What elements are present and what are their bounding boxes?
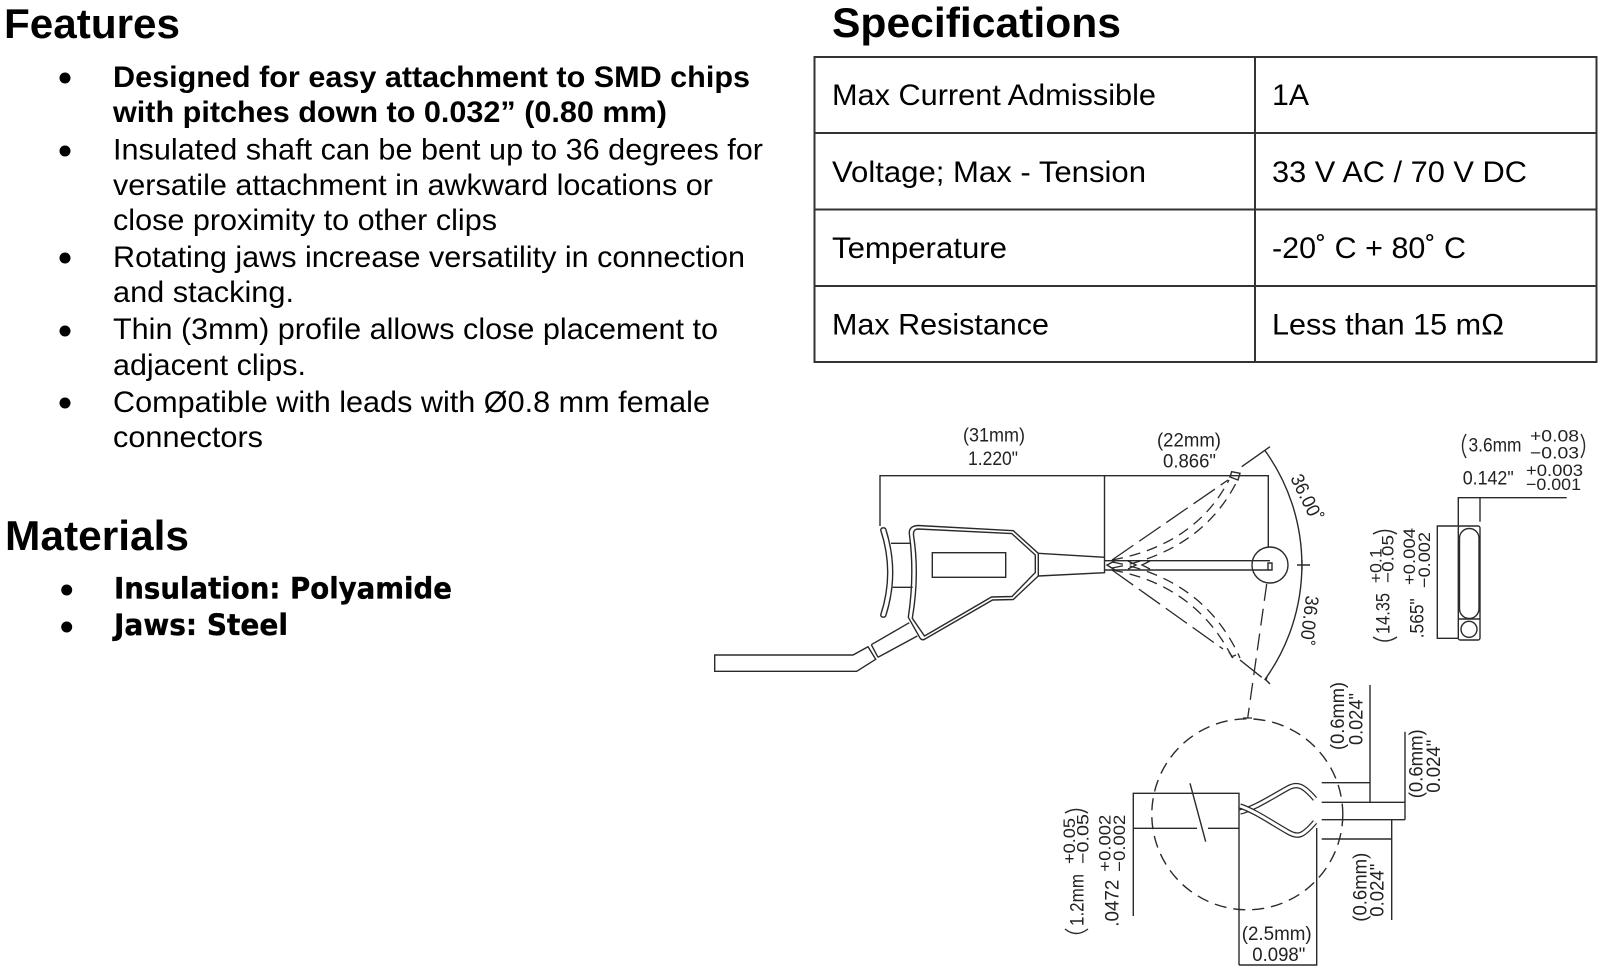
bullet: insulation: Insulation: Polyamide — [114, 572, 452, 606]
angle label lower: 36.00˚ — [1295, 594, 1322, 647]
dimension text: 1.2mm: −0.05 — [1073, 814, 1092, 864]
plunger thumb bar — [881, 528, 913, 617]
jaw lower — [1240, 806, 1315, 835]
specifications table: -20˚ C + 80˚ C — [1272, 232, 1466, 265]
clip body inner outline — [912, 529, 1035, 636]
dimension text: 2.5mm — [1242, 924, 1312, 966]
dimension text: 31mm — [963, 426, 1025, 470]
dimension text: upper 0.6mm: (0.6mm) — [1328, 682, 1349, 750]
tapered shaft — [1038, 553, 1104, 576]
diagram: end view — [1367, 427, 1584, 641]
dimension text: lower 0.6mm — [1351, 853, 1388, 922]
diagram: enlarged jaw detail — [1060, 682, 1445, 966]
dimension text: 1.2mm: 1.2mm — [1067, 874, 1088, 926]
bullet: rotating jaws: and stacking. — [113, 276, 294, 309]
specifications table: Less than 15 mΩ — [1272, 308, 1504, 342]
dimension text: 31mm: 1.220" — [968, 449, 1018, 470]
bullet: insulated shaft: versatile attachment in awkward locations or — [113, 169, 713, 202]
dimension text: upper 0.6mm — [1328, 682, 1368, 750]
specifications table — [814, 57, 1596, 362]
clip body outline — [908, 526, 1038, 640]
heading: Specifications: Specifications — [832, 0, 1121, 46]
width dimension text: +0.08 — [1530, 427, 1579, 446]
dimension text: 1.2mm — [1060, 810, 1129, 934]
heading: Materials: Materials — [5, 512, 189, 559]
width dimension text: 0.142" — [1463, 468, 1514, 489]
shaft stub with break line — [1133, 783, 1239, 965]
panel: specifications — [814, 0, 1596, 362]
clip label window — [932, 553, 1006, 577]
dimension text: lower 0.6mm: (0.6mm) — [1351, 853, 1372, 922]
height dimension text: +0.1 — [1367, 548, 1386, 583]
dimension text: right 0.6mm — [1406, 729, 1445, 798]
specifications table: 33 V AC / 70 V DC — [1272, 156, 1527, 189]
dimension text: 1.2mm: −0.002 — [1110, 815, 1129, 872]
end view body — [1458, 526, 1480, 640]
bullet: jaws: Jaws: Steel — [112, 608, 288, 642]
diagram: clip side view — [715, 426, 1326, 718]
dimension text: 1.2mm: .0472 — [1102, 880, 1123, 927]
width dimension text — [1462, 427, 1584, 494]
height dimension text: −0.002 — [1415, 532, 1434, 588]
specifications table: Temperature — [832, 232, 1007, 265]
leader to enlarged view — [1243, 584, 1267, 718]
bullet: compatible leads: Compatible with leads with Ø0.8 mm female — [113, 386, 710, 419]
bullet: rotating jaws — [60, 241, 745, 309]
height dimension text: .565" — [1407, 598, 1428, 638]
bullet: compatible leads: connectors — [113, 421, 263, 454]
width dimension text: −0.001 — [1526, 475, 1581, 494]
enlargement circle — [1152, 719, 1343, 910]
height dimension text: −0.05 — [1378, 535, 1397, 583]
angle arc — [1240, 447, 1310, 684]
dimension text: 2.5mm: 0.098" — [1252, 945, 1305, 966]
dimension text: 2.5mm: (2.5mm) — [1242, 924, 1312, 945]
specifications table: Max Current Admissible — [832, 79, 1156, 112]
dimension text: 22mm — [1157, 431, 1221, 472]
dimension text: lower 0.6mm: 0.024" — [1367, 864, 1388, 917]
dimension: 31mm and 22mm lines — [880, 476, 1268, 557]
dimension text: upper 0.6mm: 0.024" — [1347, 693, 1368, 745]
angle label upper: 36.00˚ — [1286, 471, 1326, 525]
width dimension text: −0.03 — [1530, 443, 1579, 462]
bullet: thin profile — [60, 313, 718, 382]
width dimension text: 3.6mm — [1468, 436, 1522, 457]
end view dimension lines — [1437, 498, 1567, 638]
bullet: insulated shaft: close proximity to other clips — [113, 204, 497, 237]
bullet: compatible leads — [60, 386, 710, 454]
dimension text: 22mm: (22mm) — [1157, 431, 1221, 452]
panel: features — [4, 0, 763, 454]
bullet: easy attachment — [60, 61, 750, 129]
bullet: thin profile: Thin (3mm) profile allows close placement to — [113, 313, 718, 346]
dimension text: 1.2mm: +0.002 — [1096, 815, 1115, 872]
upper bent positions — [1112, 472, 1240, 568]
dimension text: 1.2mm: +0.05 — [1060, 818, 1079, 864]
jaw dimension lines — [1239, 685, 1405, 965]
heading: Features: Features — [4, 0, 180, 47]
width dimension text: +0.003 — [1526, 461, 1583, 480]
dimension text: 31mm: (31mm) — [963, 426, 1025, 446]
lower bent positions — [1112, 562, 1240, 658]
cable and sleeve — [715, 623, 917, 671]
dimension text: right 0.6mm: 0.024" — [1424, 740, 1445, 793]
bullet: rotating jaws: Rotating jaws increase versatility in connection — [113, 241, 745, 274]
specifications table: Max Resistance — [832, 308, 1049, 342]
bullet: insulated shaft: Insulated shaft can be bent up to 36 degrees for — [113, 134, 763, 166]
specifications table: Voltage; Max - Tension — [832, 156, 1146, 189]
bullet: insulated shaft — [60, 134, 763, 237]
specifications table: 1A — [1272, 79, 1309, 112]
dimension text: right 0.6mm: (0.6mm) — [1406, 729, 1427, 798]
bullet: easy attachment: with pitches down to 0.032” (0.80 mm) — [112, 96, 667, 129]
height dimension text — [1367, 528, 1434, 641]
panel: materials — [5, 512, 452, 642]
height dimension text: +0.004 — [1400, 528, 1419, 585]
straight hook shaft — [1104, 561, 1272, 570]
dimension text: 22mm: 0.866" — [1163, 451, 1216, 472]
height dimension text: 14.35 — [1373, 593, 1394, 634]
jaw upper — [1240, 786, 1315, 812]
detail circle — [1252, 547, 1288, 583]
bullet: easy attachment: Designed for easy attachment to SMD chips — [113, 61, 750, 94]
bullet: thin profile: adjacent clips. — [113, 349, 306, 382]
